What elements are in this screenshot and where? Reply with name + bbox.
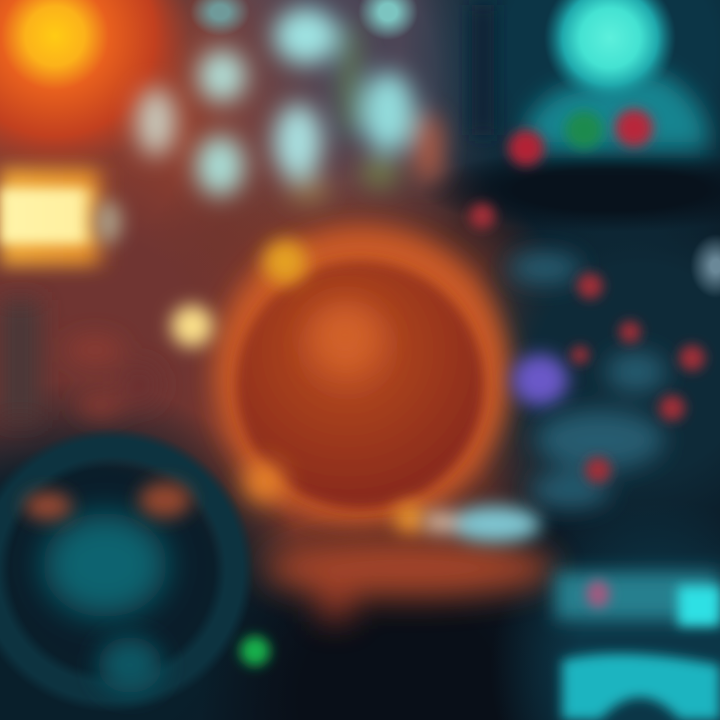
top-right cyan shape with coloured dots (472, 0, 708, 166)
left wall texture (0, 300, 160, 420)
top-left fire glow (0, 0, 190, 171)
central orange sphere (171, 227, 510, 536)
left glowing bar (0, 168, 122, 266)
bottom-right cyan console (555, 572, 720, 720)
green indicator light (240, 636, 270, 666)
right panel network with red dots (469, 203, 720, 508)
pale strip below sphere (422, 506, 541, 542)
violet blob (512, 354, 568, 406)
pale cyan panels grid (136, 0, 444, 204)
steering wheel ring (0, 420, 262, 720)
orange spill below sphere (265, 538, 555, 620)
